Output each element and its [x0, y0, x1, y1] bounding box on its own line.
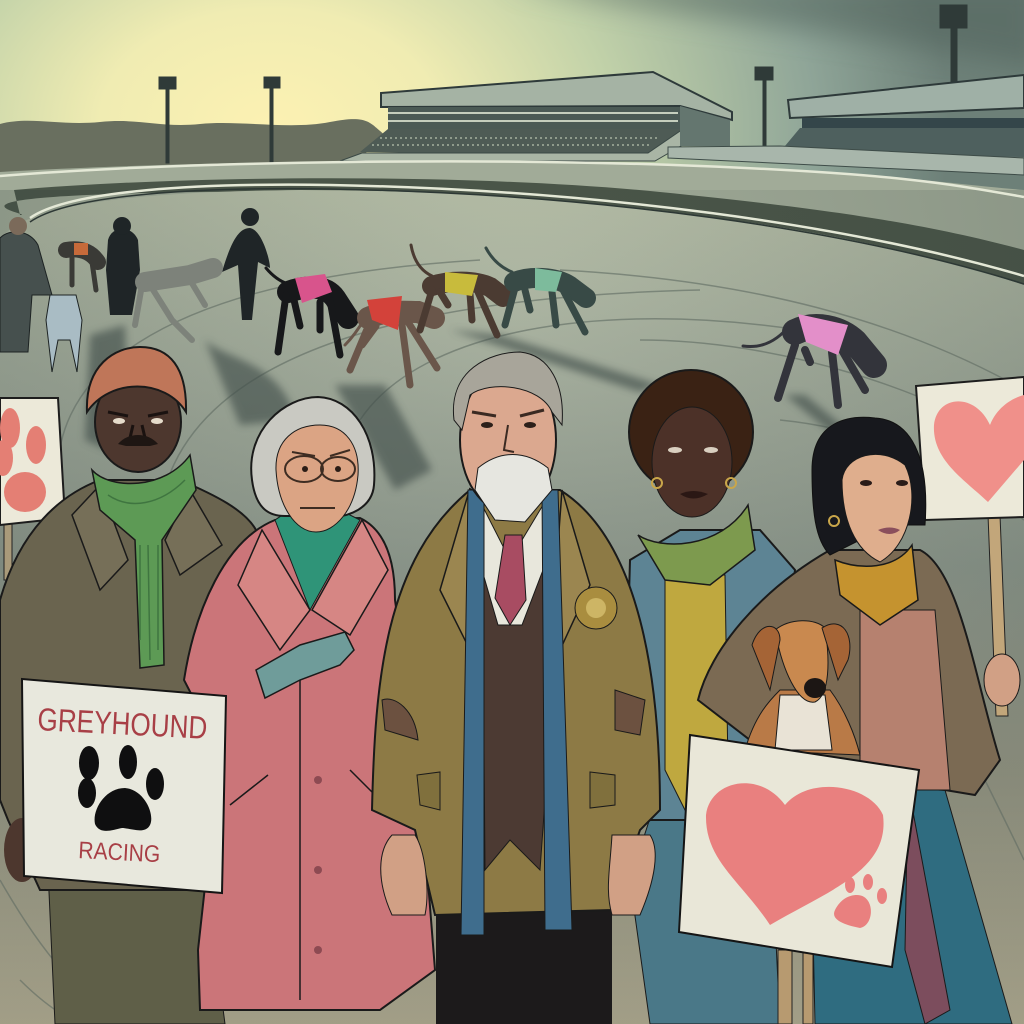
sign: greyhound racing: RACING	[78, 837, 161, 868]
greyhound: brown with yellow vest	[411, 245, 503, 335]
second grandstand	[668, 75, 1024, 175]
sign: greyhound racing: GREYHOUND	[37, 701, 208, 746]
sky	[0, 0, 1024, 200]
right protest sign	[916, 377, 1024, 716]
left protest sign (partial)	[0, 398, 65, 580]
greyhound: black with pink vest	[266, 268, 348, 355]
infield and track	[0, 161, 1024, 290]
icon: paw print	[78, 745, 164, 831]
dog in arms	[745, 690, 860, 755]
gloved hand	[256, 632, 354, 698]
rails	[0, 161, 1024, 276]
greyhound: right with pink vest	[743, 314, 874, 405]
dog shadows	[85, 325, 850, 490]
small dog orange vest	[66, 249, 98, 290]
hills	[0, 119, 385, 172]
main grandstand	[340, 72, 732, 161]
person 1: man with green scarf	[0, 347, 256, 1024]
icon: small paw	[834, 874, 887, 928]
clouds	[500, 0, 1024, 70]
sign: heart and paw	[679, 735, 950, 1024]
person 2: older woman in pink coat	[184, 397, 435, 1010]
handler 2	[106, 229, 140, 315]
person 5: woman holding dog	[698, 417, 1020, 1024]
person 4: woman with afro	[625, 370, 795, 1024]
track furrows	[0, 260, 1024, 1024]
scarf	[92, 455, 196, 668]
handler left	[0, 232, 52, 352]
greyhound: brown with red vest	[345, 296, 437, 385]
sign: greyhound racing	[22, 679, 226, 893]
person 3: central old man	[372, 352, 660, 1024]
handler 3	[222, 228, 270, 320]
far-left handlers and dogs	[0, 208, 270, 372]
small dog pale	[46, 295, 82, 372]
floodlights	[159, 5, 967, 163]
grey dogs pair	[135, 268, 213, 340]
greyhound: green with teal vest	[486, 248, 586, 332]
hand on sign	[4, 818, 40, 882]
